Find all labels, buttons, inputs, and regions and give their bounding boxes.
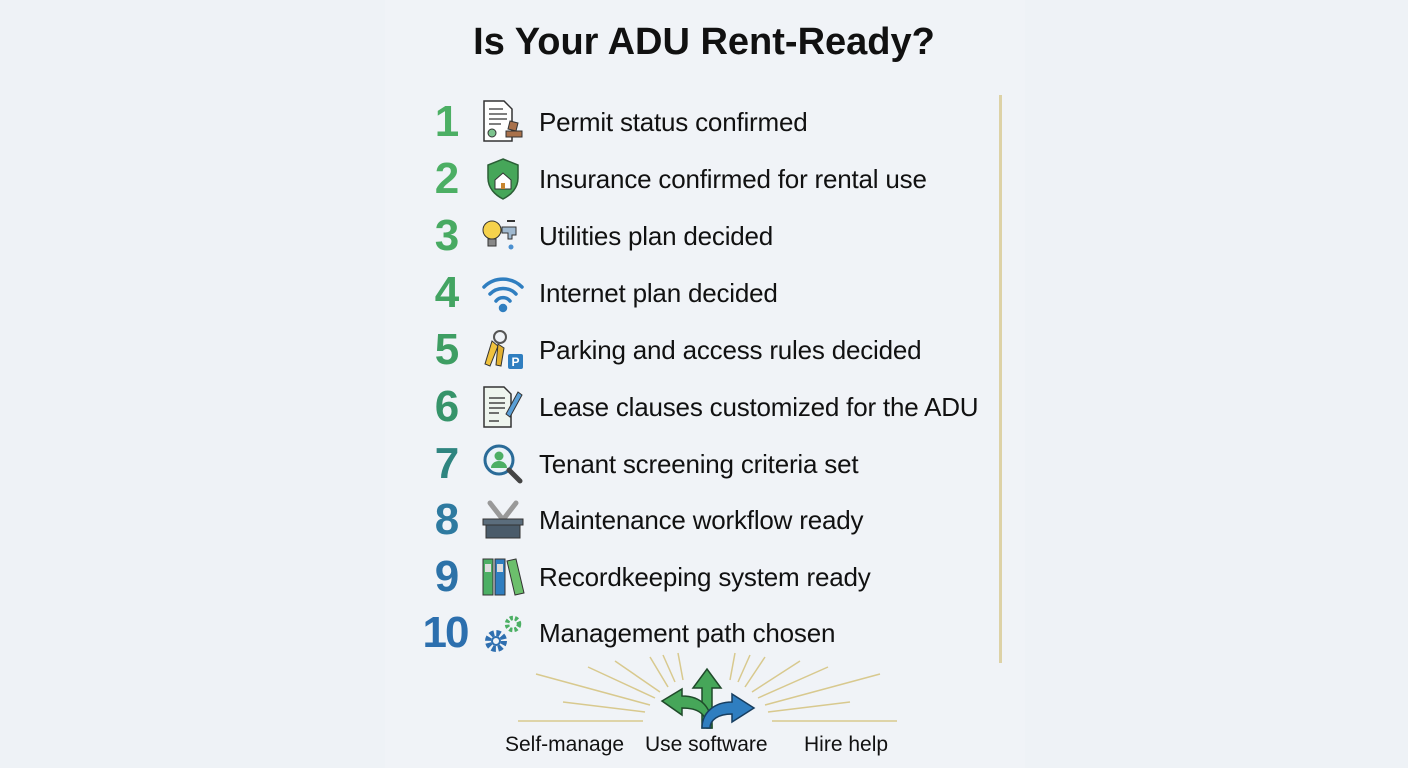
title: Is Your ADU Rent-Ready? — [473, 21, 935, 63]
item 9: 9 — [435, 552, 459, 601]
item 8: 8 — [435, 495, 459, 544]
item 5 — [435, 325, 921, 374]
item 4 — [435, 268, 778, 317]
item 8 — [435, 495, 864, 544]
item 8: Maintenance workflow ready — [539, 505, 863, 535]
icon: binders — [482, 558, 525, 596]
item 10: 10 — [423, 608, 467, 657]
icon: wifi — [482, 277, 524, 312]
item 10: Management path chosen — [539, 618, 835, 648]
decision arrows with rays — [518, 652, 897, 729]
item 3: 3 — [435, 211, 459, 260]
item 6: 6 — [435, 382, 459, 431]
label: self-manage: Self-manage — [505, 733, 624, 756]
item 7: Tenant screening criteria set — [539, 449, 858, 479]
item 3 — [435, 211, 773, 260]
icon: keys parking — [484, 330, 523, 369]
item 7 — [435, 439, 858, 488]
item 9 — [435, 552, 871, 601]
item 4: 4 — [435, 268, 459, 317]
item 6 — [435, 382, 978, 431]
icon: magnifier person — [484, 444, 522, 484]
item 5: Parking and access rules decided — [539, 335, 921, 365]
item 10 — [423, 608, 835, 657]
icon: lease pen — [483, 386, 523, 428]
item 4: Internet plan decided — [539, 278, 778, 308]
item 9: Recordkeeping system ready — [539, 562, 871, 592]
icon: bulb and tap — [482, 220, 516, 250]
item 1: Permit status confirmed — [539, 107, 808, 137]
item 3: Utilities plan decided — [539, 221, 773, 251]
item 5: 5 — [435, 325, 459, 374]
icon: keys parking: P — [511, 355, 520, 369]
item 2: 2 — [435, 154, 459, 203]
icon: permit document — [483, 100, 522, 142]
item 2: Insurance confirmed for rental use — [539, 164, 927, 194]
item 7: 7 — [435, 439, 459, 488]
label: use software: Use software — [645, 733, 768, 756]
item 1: 1 — [435, 97, 459, 146]
item 2 — [435, 154, 927, 203]
icon: toolbox — [482, 500, 524, 538]
item 6: Lease clauses customized for the ADU — [539, 392, 978, 422]
label: hire help: Hire help — [804, 733, 888, 756]
icon: shield house — [487, 158, 519, 200]
item 1 — [435, 97, 808, 146]
icon: gears — [485, 616, 522, 652]
